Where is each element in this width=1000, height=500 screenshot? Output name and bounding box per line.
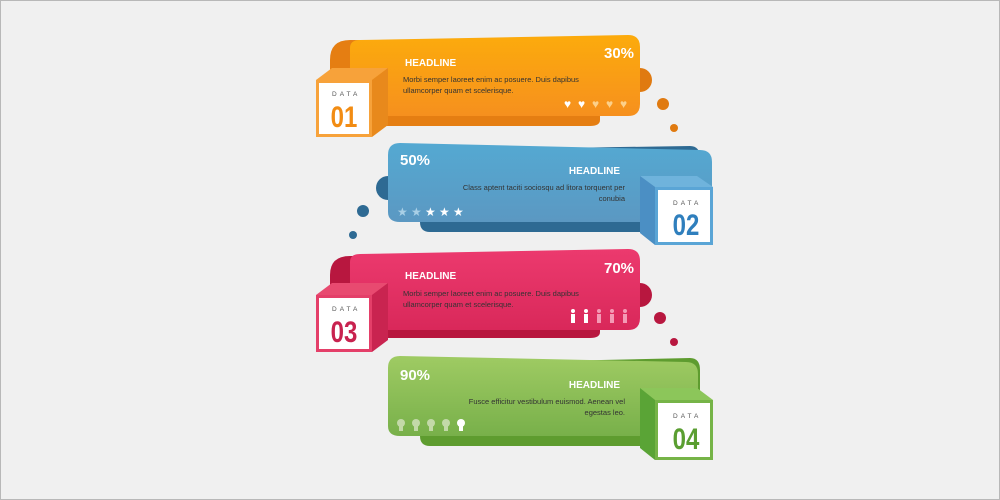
text 03: Morbi semper laoreet enim ac posuere. Duis dapibus — [403, 289, 579, 298]
cube 02 — [640, 176, 713, 245]
icons: stars: ★ — [397, 205, 408, 219]
panel: data 01: ullamcorper quam et scelerisque. — [403, 86, 513, 95]
panel: data 04 — [388, 356, 713, 460]
percent 50: 50% — [400, 152, 430, 169]
cube 02: DATA — [673, 200, 701, 207]
cube 01: DATA — [332, 91, 360, 98]
headline 04: HEADLINE — [569, 380, 620, 391]
panel: data 02 — [376, 143, 713, 245]
cube 03: DATA — [332, 306, 360, 313]
icons: people — [571, 309, 627, 323]
dots pink — [654, 312, 678, 346]
panel: data 04: egestas leo. — [585, 408, 625, 417]
percent 90: 90% — [400, 367, 430, 384]
text 01: Morbi semper laoreet enim ac posuere. Duis dapibus — [403, 75, 579, 84]
cube 01: 01 — [331, 99, 357, 134]
cube 03 — [316, 283, 388, 352]
panel: data 03: ullamcorper quam et scelerisque. — [403, 300, 513, 309]
icons: hearts: ♥ — [606, 97, 613, 111]
icons: stars: ★ — [411, 205, 422, 219]
cube 03: 03 — [331, 314, 357, 349]
cube 02: 02 — [673, 207, 699, 242]
panel: data 02: conubia — [599, 194, 626, 203]
headline 01: HEADLINE — [405, 58, 456, 69]
text 02: Class aptent taciti sociosqu ad litora torquent per — [463, 183, 625, 192]
text 04: Fusce efficitur vestibulum euismod. Aenean vel — [469, 397, 625, 406]
icons: stars — [397, 205, 464, 219]
icons: hearts: ♥ — [578, 97, 585, 111]
icons: stars: ★ — [453, 205, 464, 219]
headline 03: HEADLINE — [405, 271, 456, 282]
dots orange — [657, 98, 678, 132]
percent 70: 70% — [604, 260, 634, 277]
percent 30: 30% — [604, 45, 634, 62]
cube 04: 04 — [673, 421, 699, 456]
panel: data 03 — [316, 249, 652, 352]
icons: stars: ★ — [439, 205, 450, 219]
cube 04 — [640, 388, 713, 460]
icons: hearts: ♥ — [564, 97, 571, 111]
icons: hearts: ♥ — [620, 97, 627, 111]
icons: hearts — [564, 97, 627, 111]
icons: stars: ★ — [425, 205, 436, 219]
icons: bulbs — [397, 419, 465, 431]
dots blue — [349, 205, 369, 239]
headline 02: HEADLINE — [569, 166, 620, 177]
cube 01 — [316, 68, 388, 137]
cube 04: DATA — [673, 413, 701, 420]
icons: hearts: ♥ — [592, 97, 599, 111]
panel: data 01 — [316, 35, 652, 137]
